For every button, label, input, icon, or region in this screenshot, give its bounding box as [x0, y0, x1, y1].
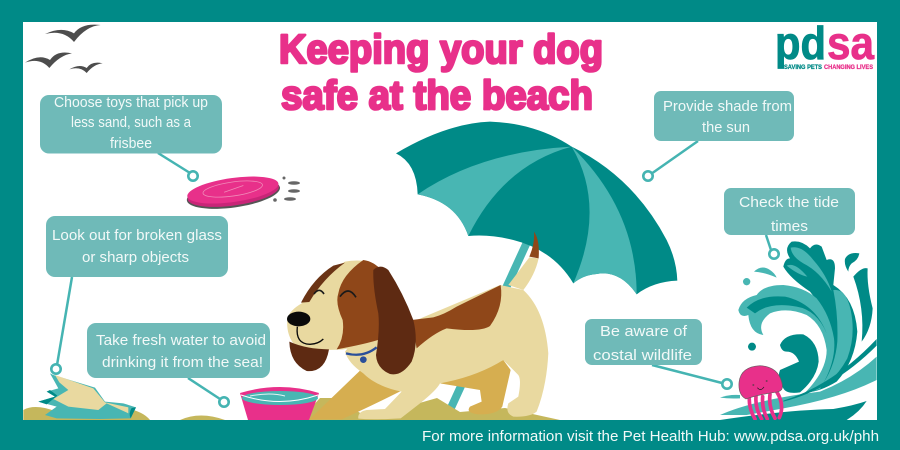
- icon: jellyfish: [739, 366, 782, 419]
- callout: shade: Provide shade from: [663, 98, 792, 115]
- umbrella: [396, 122, 677, 294]
- back plume: [783, 241, 857, 392]
- callout: glass: Look out for broken glass: [52, 227, 222, 244]
- sand mounds: [180, 398, 560, 420]
- callout: toys: Choose toys that pick up: [54, 94, 208, 111]
- icon: water bowl: [240, 387, 319, 420]
- callout: shade: the sun: [702, 119, 750, 136]
- logo: pdsa: pd: [775, 17, 826, 69]
- logo: pdsa: SAVING PETS: [784, 64, 823, 71]
- callout: glass: or sharp objects: [82, 249, 189, 266]
- logo: pdsa: [775, 17, 874, 71]
- icon: broken bottle: [23, 373, 150, 420]
- callout: tide: [724, 188, 855, 259]
- logo: pdsa: CHANGING LIVES: [824, 64, 874, 71]
- callout: shade: [643, 91, 794, 181]
- foreground swells: [720, 357, 877, 415]
- saddle patch: [412, 285, 501, 348]
- title: safe at the beach: [281, 72, 593, 118]
- umbrella pole: [450, 240, 528, 410]
- dog: [287, 232, 548, 419]
- ears: [373, 267, 416, 374]
- body: [345, 285, 548, 419]
- collar: [346, 347, 377, 355]
- callout: tide: times: [771, 218, 808, 235]
- callout: water: drinking it from the sea!: [102, 354, 263, 371]
- head: [287, 260, 382, 350]
- inner curl: [779, 334, 819, 393]
- title: [279, 26, 603, 118]
- plume highlights: [787, 247, 832, 292]
- icon: wave: [720, 241, 877, 420]
- callout: wildlife: Be aware of: [600, 323, 688, 340]
- callout: wildlife: [585, 319, 732, 389]
- callout: glass: [46, 216, 228, 374]
- wave crest: [738, 285, 834, 394]
- callout: wildlife: costal wildlife: [593, 347, 692, 364]
- logo: pdsa: sa: [827, 17, 874, 69]
- callout: tide: Check the tide: [739, 194, 839, 211]
- spray: [845, 253, 859, 272]
- birds: [25, 25, 103, 73]
- footer text: For more information visit the Pet Health Hub: www.pdsa.org.uk/phh: [422, 428, 879, 445]
- far legs: [309, 360, 511, 419]
- dark fold: [747, 296, 827, 333]
- callout: toys: frisbee: [110, 135, 152, 152]
- eyes: [314, 290, 356, 297]
- nose and mouth: [287, 312, 310, 326]
- bottom bar mask: [0, 420, 900, 450]
- callout: toys: less sand, such as a: [71, 114, 192, 131]
- callout: water: [87, 323, 270, 407]
- callout: toys: [40, 94, 222, 181]
- title: Keeping your dog: [279, 26, 603, 72]
- callout: water: Take fresh water to avoid: [96, 332, 266, 349]
- icon: frisbee: [185, 172, 300, 214]
- tail: [508, 257, 539, 290]
